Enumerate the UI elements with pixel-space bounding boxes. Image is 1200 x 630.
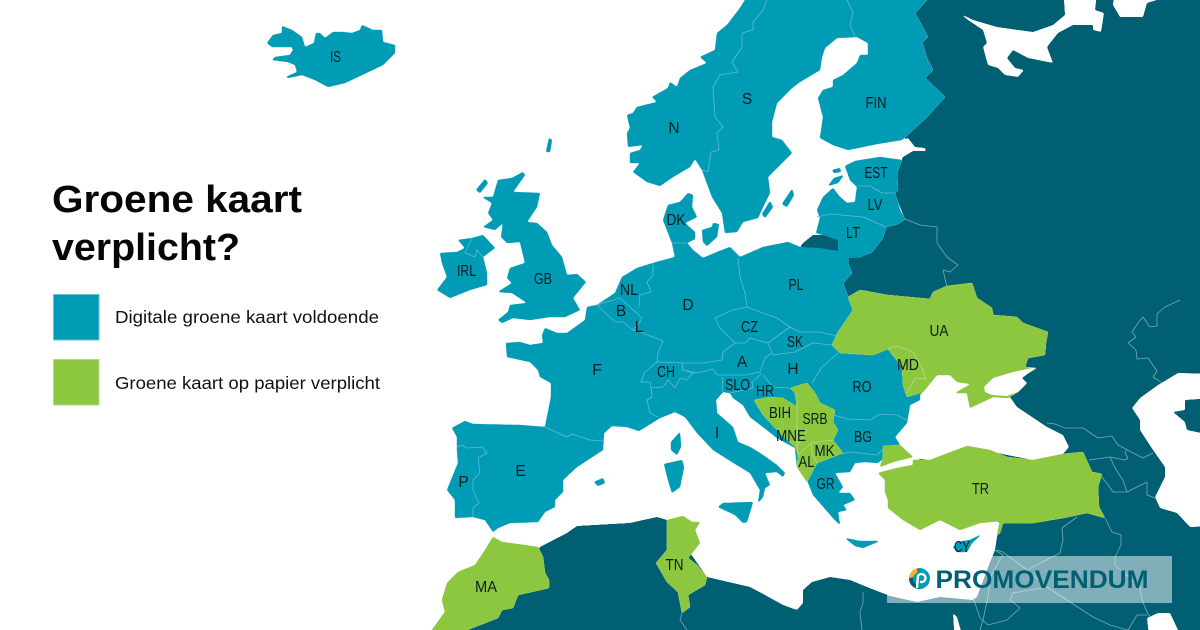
label: GB: GB (534, 271, 552, 288)
label: I: I (715, 425, 719, 442)
sea: Barents inlet (1113, 0, 1160, 17)
label: UA: UA (930, 323, 949, 340)
Ukraine and Moldova (832, 283, 1048, 408)
countries: digital green card sufficient (blue) (267, 0, 982, 552)
label: LV: LV (868, 197, 883, 214)
label: S: S (742, 91, 752, 108)
label: MD: MD (897, 357, 919, 374)
Hebrides (476, 179, 488, 193)
label: MK: MK (814, 443, 835, 460)
sea: Red Sea (953, 613, 965, 630)
label: TN: TN (666, 557, 684, 574)
Crete (845, 538, 880, 548)
label: MNE: MNE (776, 428, 806, 445)
legend swatch: blue (54, 294, 99, 340)
Corsica (671, 432, 681, 455)
Balkans (754, 383, 843, 482)
legend (54, 294, 380, 405)
Iceland (267, 25, 395, 87)
logo icon (909, 568, 930, 589)
Morocco (420, 537, 549, 630)
Sardinia (664, 460, 684, 493)
label: L: L (635, 319, 644, 336)
label: SLO: SLO (725, 377, 750, 394)
label: PL: PL (788, 277, 804, 294)
Continental Europe (447, 193, 920, 532)
sea: Caspian Sea (1132, 373, 1200, 527)
Turkey (878, 446, 1105, 535)
label: D: D (682, 297, 694, 314)
label: LT: LT (846, 225, 860, 242)
title: Groene kaart (52, 179, 302, 221)
countries: paper green card required (green) (420, 283, 1105, 630)
label: E: E (515, 463, 526, 480)
label: CH: CH (657, 364, 675, 381)
label: IRL: IRL (457, 263, 476, 280)
label: CY: CY (954, 539, 970, 556)
Baltic states (816, 157, 905, 257)
legend label: paper: Groene kaart op papier verplicht (115, 373, 380, 393)
label: N: N (668, 120, 680, 137)
label: EST: EST (864, 165, 888, 182)
Estonian islands (832, 168, 841, 173)
legend swatch: green (54, 360, 99, 405)
label: SRB: SRB (802, 411, 828, 428)
European Turkey (880, 445, 913, 467)
map: non-covered land (dark teal) (467, 0, 1200, 630)
seas on top of dark land (895, 0, 1200, 630)
borders of non-covered countries (680, 219, 1180, 630)
sea: Persian Gulf (1147, 613, 1185, 630)
Sea of Azov (984, 367, 1037, 396)
label: BG: BG (854, 429, 872, 446)
Tunisia (656, 516, 707, 613)
Cyprus (953, 534, 982, 552)
legend label: digital: Digitale groene kaart voldoende (115, 307, 379, 327)
label: CZ: CZ (741, 319, 758, 336)
label: P: P (458, 474, 469, 491)
Sicily (718, 502, 753, 523)
label: GR: GR (816, 476, 834, 493)
sea: Black Sea (895, 370, 1069, 460)
label: FIN: FIN (866, 95, 886, 112)
sea: Gulf of Finland tip (895, 138, 926, 160)
label: SK: SK (787, 334, 804, 351)
Gotland (782, 189, 794, 207)
internal borders of blue countries (457, 0, 907, 517)
label: MA: MA (475, 579, 498, 596)
label: BIH: BIH (769, 405, 791, 422)
logo wordmark: PROMOVENDUM (936, 566, 1148, 594)
Kaliningrad (dark) (800, 235, 838, 251)
sea: White Sea (953, 0, 1104, 77)
label: B: B (616, 303, 626, 320)
logo (909, 566, 1148, 594)
label: HR: HR (756, 383, 774, 400)
label: TR: TR (972, 481, 989, 498)
title: verplicht? (52, 227, 240, 269)
Mallorca (594, 478, 605, 486)
label: AL: AL (798, 454, 815, 471)
label: DK: DK (666, 212, 686, 229)
Norway, Sweden and Finland (627, 0, 945, 233)
label: IS: IS (330, 49, 341, 66)
label: A: A (737, 354, 748, 371)
title (52, 179, 302, 269)
label: RO: RO (852, 379, 872, 396)
logo band (887, 556, 1172, 603)
Oland (762, 201, 773, 218)
Zealand (702, 223, 719, 246)
label: F: F (592, 362, 602, 379)
Ireland (437, 235, 495, 298)
label: H: H (787, 361, 799, 378)
Faroe (546, 138, 552, 152)
Great Britain (482, 172, 586, 323)
borders inside green (797, 346, 926, 463)
country labels (330, 49, 989, 596)
label: NL: NL (620, 282, 638, 299)
